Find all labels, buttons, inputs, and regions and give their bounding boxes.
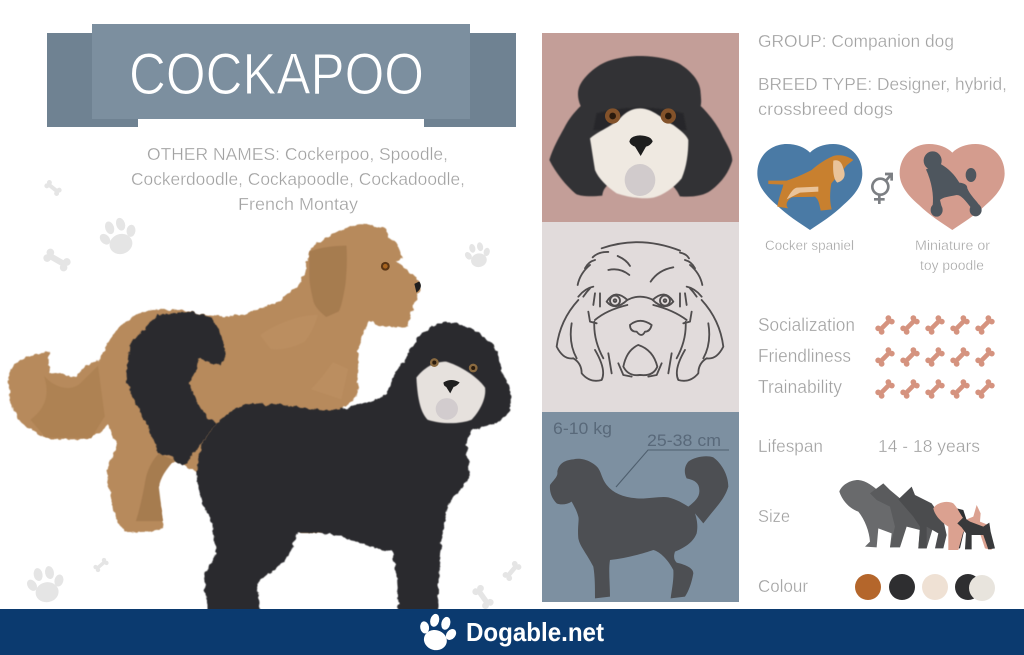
socialization row: Socialization <box>758 315 855 335</box>
lifespan row: Lifespan <box>758 436 823 456</box>
body highlight <box>260 315 348 399</box>
black dog body <box>197 322 511 619</box>
colour swatches <box>855 574 995 601</box>
poodle label: toy poodle <box>920 258 984 273</box>
footer bar <box>0 609 1024 655</box>
colour row <box>758 574 995 601</box>
trainability row <box>758 377 996 400</box>
friendliness row <box>758 346 996 368</box>
panel: colour portrait <box>542 33 739 222</box>
other names text: French Montay <box>238 194 358 214</box>
ear shading <box>309 246 347 317</box>
group text: GROUP: Companion dog <box>758 31 954 51</box>
panel: size silhouette <box>542 412 739 602</box>
portrait face <box>549 56 732 198</box>
breed type text <box>758 74 1007 119</box>
height label: 25-38 cm <box>647 432 721 450</box>
poodle label <box>915 238 991 273</box>
background paws and bones <box>23 179 523 610</box>
friendliness row: Friendliness <box>758 346 851 366</box>
eye and nose <box>381 262 390 271</box>
icon: paw logo <box>413 610 461 655</box>
brown cockapoo dog <box>9 224 421 533</box>
black dog tail <box>127 312 225 467</box>
title text: COCKAPOO <box>129 42 424 107</box>
cocker spaniel label: Cocker spaniel <box>765 238 854 253</box>
leg shading <box>136 454 174 521</box>
size row <box>758 480 995 550</box>
other names text: Cockerdoodle, Cockapoodle, Cockadoodle, <box>131 169 465 189</box>
weight label: 6-10 kg <box>553 420 612 438</box>
lifespan row <box>758 436 980 456</box>
black dog eyes <box>430 358 439 367</box>
height leader line <box>616 450 729 487</box>
black dog face <box>416 362 485 423</box>
silhouette dog <box>550 456 728 598</box>
icon: gender symbol <box>872 174 892 204</box>
trainability row: Trainability <box>758 377 842 397</box>
icon: cocker spaniel heart <box>757 144 862 230</box>
poodle label: Miniature or <box>915 238 991 253</box>
breed type text: BREED TYPE: Designer, hybrid, <box>758 74 1007 94</box>
line-art face <box>557 242 723 381</box>
tail shading <box>30 366 105 438</box>
title banner <box>47 24 516 128</box>
lifespan row: 14 - 18 years <box>878 436 980 456</box>
parent breed hearts <box>757 144 1005 230</box>
size row: Size <box>758 506 790 526</box>
other names text: OTHER NAMES: Cockerpoo, Spoodle, <box>147 144 448 164</box>
socialization row <box>758 314 996 336</box>
black cockapoo dog <box>127 312 511 619</box>
icon: poodle heart <box>900 144 1005 230</box>
site name: Dogable.net <box>466 617 604 647</box>
other names text <box>131 144 465 214</box>
breed type text: crossbreed dogs <box>758 99 893 119</box>
panel: line-art portrait <box>542 222 739 412</box>
size comparison silhouettes <box>839 480 995 550</box>
colour row: Colour <box>758 576 808 596</box>
